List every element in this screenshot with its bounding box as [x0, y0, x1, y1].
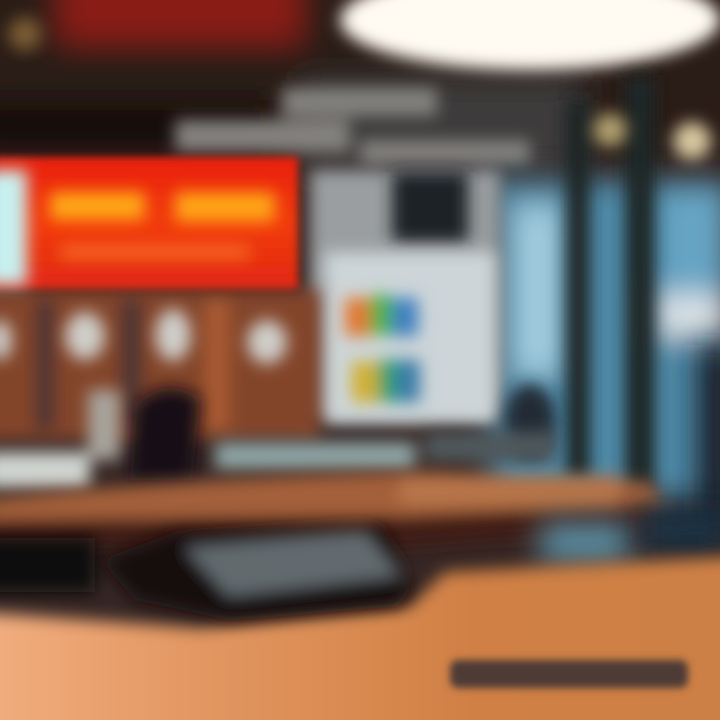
counter items — [0, 390, 555, 488]
grey wall section — [310, 170, 500, 420]
ceiling — [0, 0, 720, 170]
white panel — [325, 252, 495, 422]
corner lamp — [8, 17, 42, 51]
colored logo squares — [345, 295, 420, 402]
white round panel lights — [0, 309, 287, 364]
dark wall screen — [392, 172, 468, 242]
blurred brand text — [450, 660, 688, 688]
right window — [490, 180, 720, 500]
person right — [504, 384, 556, 460]
pendant lights — [593, 113, 711, 160]
dark left foreground — [0, 538, 95, 592]
keyboard device — [100, 528, 410, 620]
cyan sign edge — [0, 170, 27, 285]
blurred heading text — [175, 88, 530, 164]
right dark lower band — [640, 510, 720, 550]
brown panels under sign — [0, 290, 320, 440]
foreground wood surface — [0, 556, 720, 720]
person far right — [698, 345, 720, 535]
blurred sign text — [50, 192, 275, 258]
lower blue area — [540, 522, 630, 564]
red sign — [0, 157, 298, 289]
dark columns — [566, 75, 655, 495]
seated person left — [130, 388, 200, 480]
ceiling light — [340, 0, 720, 70]
long wooden table — [0, 472, 665, 548]
